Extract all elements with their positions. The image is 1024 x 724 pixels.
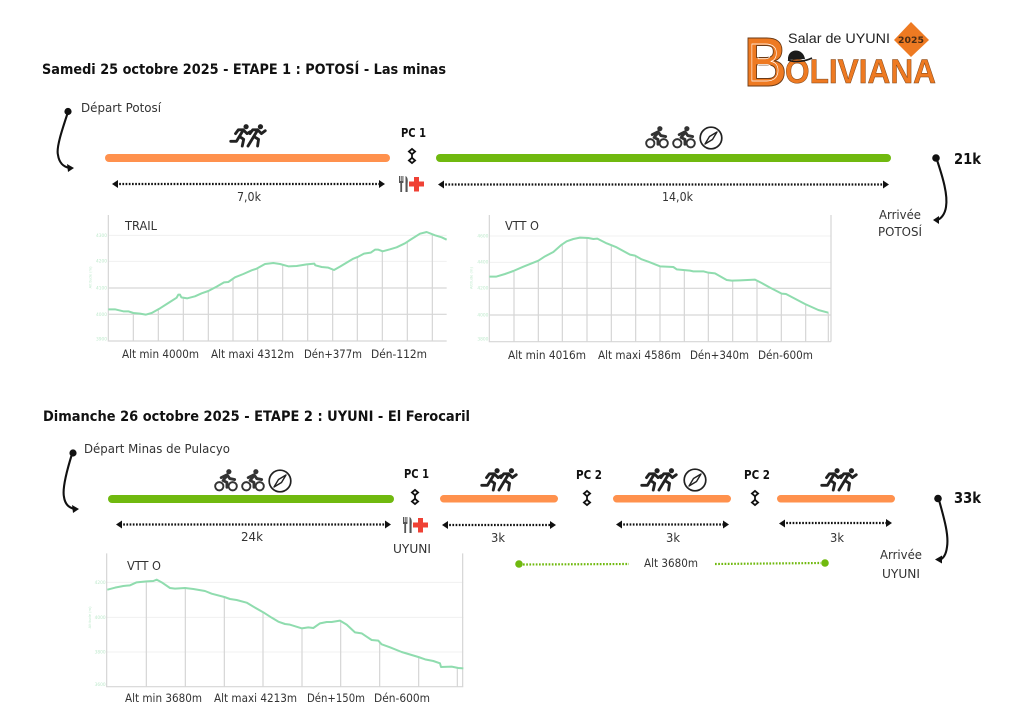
dotted arrow: 24k — [116, 520, 391, 544]
checkpoint PC 2: PC 2 — [744, 468, 770, 482]
départ Potosí: Départ Potosí — [81, 100, 161, 115]
dotted arrow: 3k — [616, 520, 729, 545]
dotted arrow: 14,0k: 14,0k — [662, 189, 694, 204]
chart stats: VTT O étape 2: Alt maxi 4213m — [214, 691, 297, 705]
dotted arrow: 7,0k: 7,0k — [237, 189, 262, 204]
dotted arrow: 14,0k — [438, 180, 889, 204]
chart: profil VTT O étape 1: Altitude (m) — [470, 267, 474, 289]
dotted arrow: 7,0k — [112, 180, 385, 204]
icons: VTT and orientation — [646, 126, 722, 149]
chart stats: TRAIL: Alt maxi 4312m — [211, 347, 294, 361]
chart label: TRAIL: TRAIL — [124, 218, 157, 233]
chart: profil VTT O étape 1 — [470, 215, 831, 343]
checkpoint PC 2 — [744, 468, 770, 505]
chart stats: VTT O étape 2: Alt min 3680m — [125, 691, 202, 705]
chart stats: TRAIL: Dén-112m — [371, 347, 427, 361]
logo: Boliviana Salar de Uyuni 2025: OLIVIANA — [785, 53, 936, 91]
chart: profil VTT O étape 1: 4000 — [477, 312, 489, 318]
arrivée Uyuni and total: 33k — [954, 489, 982, 507]
arrivée Potosí and total — [878, 150, 982, 239]
dotted arrow: 3k: 3k — [666, 530, 681, 545]
title: étape 2: Dimanche 26 octobre 2025 - ETAPE 2 : UYUNI - El Ferocaril — [43, 409, 470, 425]
dotted arrow: 3k — [442, 521, 556, 545]
chart stats: VTT O étape 1 — [508, 348, 813, 362]
checkpoint PC 2: PC 2 — [576, 468, 602, 482]
chart: profil TRAIL: 4200 — [96, 259, 107, 265]
arrivée Potosí and total: 21k — [954, 150, 982, 168]
logo: Boliviana Salar de Uyuni 2025: Salar de UYUNI — [788, 30, 890, 46]
logo: Boliviana Salar de Uyuni 2025 — [744, 22, 936, 101]
chart stats: VTT O étape 1: Dén+340m — [690, 348, 749, 362]
chart: profil TRAIL: 3900 — [96, 337, 107, 343]
dotted arrow: 3k: 3k — [830, 530, 845, 545]
chart: profil TRAIL: Altitude (m) — [88, 266, 92, 288]
icons: VTT and orientation — [215, 469, 291, 492]
checkpoint PC 1 — [393, 467, 431, 556]
chart: profil VTT O étape 1: 3800 — [477, 337, 489, 343]
chart stats: VTT O étape 1: Dén-600m — [758, 348, 813, 362]
chart: profil VTT O étape 2: Altitude (m) — [88, 606, 92, 628]
title: étape 1: Samedi 25 octobre 2025 - ETAPE 1 : POTOSÍ - Las minas — [42, 61, 446, 78]
arrivée Uyuni and total: Arrivée — [880, 547, 922, 562]
icon: trail runners — [231, 124, 265, 146]
checkpoint PC 1 — [399, 126, 426, 192]
chart: profil VTT O étape 1: 4600 — [477, 233, 489, 239]
chart stats: TRAIL: Dén+377m — [304, 347, 362, 361]
icon: trail runners — [482, 468, 516, 490]
bar: trail segment 1 — [440, 495, 558, 502]
checkpoint PC 1: PC 1 — [404, 467, 429, 481]
chart: profil TRAIL — [88, 215, 447, 343]
chart stats: TRAIL: Alt min 4000m — [122, 347, 199, 361]
bar: VTT segment — [436, 154, 891, 162]
chart: profil VTT O étape 1: 4400 — [477, 260, 489, 266]
logo: Boliviana Salar de Uyuni 2025: B — [749, 33, 780, 93]
arrivée Potosí and total: POTOSÍ — [878, 224, 922, 239]
départ Potosí — [58, 100, 161, 172]
dotted arrow: 3k — [779, 519, 892, 545]
panel: étape 2 parcours — [64, 441, 982, 581]
chart stats: VTT O étape 2: Dén+150m — [307, 691, 365, 705]
arrivée Uyuni and total: UYUNI — [882, 566, 920, 581]
chart: profil VTT O étape 2: 3800 — [95, 650, 106, 656]
arrivée Uyuni and total — [880, 489, 982, 581]
icons: trail and orientation — [642, 468, 706, 491]
chart stats: VTT O étape 2: Dén-600m — [374, 691, 430, 705]
bar: trail segment — [105, 154, 390, 162]
dotted arrow: 24k: 24k — [241, 529, 264, 544]
logo: Boliviana Salar de Uyuni 2025: 2025 — [898, 36, 924, 46]
altitude marker: Alt 3680m — [515, 556, 829, 570]
chart: profil VTT O étape 1: 4200 — [477, 286, 489, 292]
chart label: VTT O: VTT O — [127, 558, 161, 573]
chart: profil VTT O étape 2: 4000 — [95, 615, 106, 621]
chart stats: VTT O étape 1: Alt maxi 4586m — [598, 348, 681, 362]
départ Minas de Pulacyo: Départ Minas de Pulacyo — [84, 441, 230, 456]
chart label: VTT O: VTT O — [505, 218, 539, 233]
altitude marker: Alt 3680m: Alt 3680m — [644, 556, 698, 570]
bar: trail segment 3 — [777, 495, 895, 502]
chart: profil VTT O étape 2 — [88, 553, 463, 688]
chart: profil VTT O étape 2: 3600 — [95, 682, 106, 688]
panel: étape 1 parcours — [58, 100, 982, 239]
chart stats: VTT O étape 1: Alt min 4016m — [508, 348, 586, 362]
checkpoint PC 1: PC 1 — [401, 126, 426, 140]
chart stats: TRAIL — [122, 347, 427, 361]
chart: profil TRAIL: 4000 — [96, 312, 107, 318]
chart: profil TRAIL: 4100 — [96, 285, 107, 291]
départ Minas de Pulacyo — [64, 441, 230, 513]
chart stats: VTT O étape 2 — [125, 691, 430, 705]
bar: trail segment 2 — [613, 495, 731, 502]
dotted arrow: 3k: 3k — [491, 530, 506, 545]
icon: trail runners — [822, 468, 856, 490]
checkpoint PC 2 — [576, 468, 602, 505]
checkpoint PC 1: UYUNI — [393, 541, 431, 556]
logo: Boliviana Salar de Uyuni 2025: B — [744, 23, 787, 101]
bar: VTT segment — [108, 495, 394, 503]
arrivée Potosí and total: Arrivée — [879, 207, 921, 222]
chart: profil VTT O étape 2: 4200 — [95, 580, 106, 586]
chart: profil TRAIL: 4300 — [96, 233, 107, 239]
